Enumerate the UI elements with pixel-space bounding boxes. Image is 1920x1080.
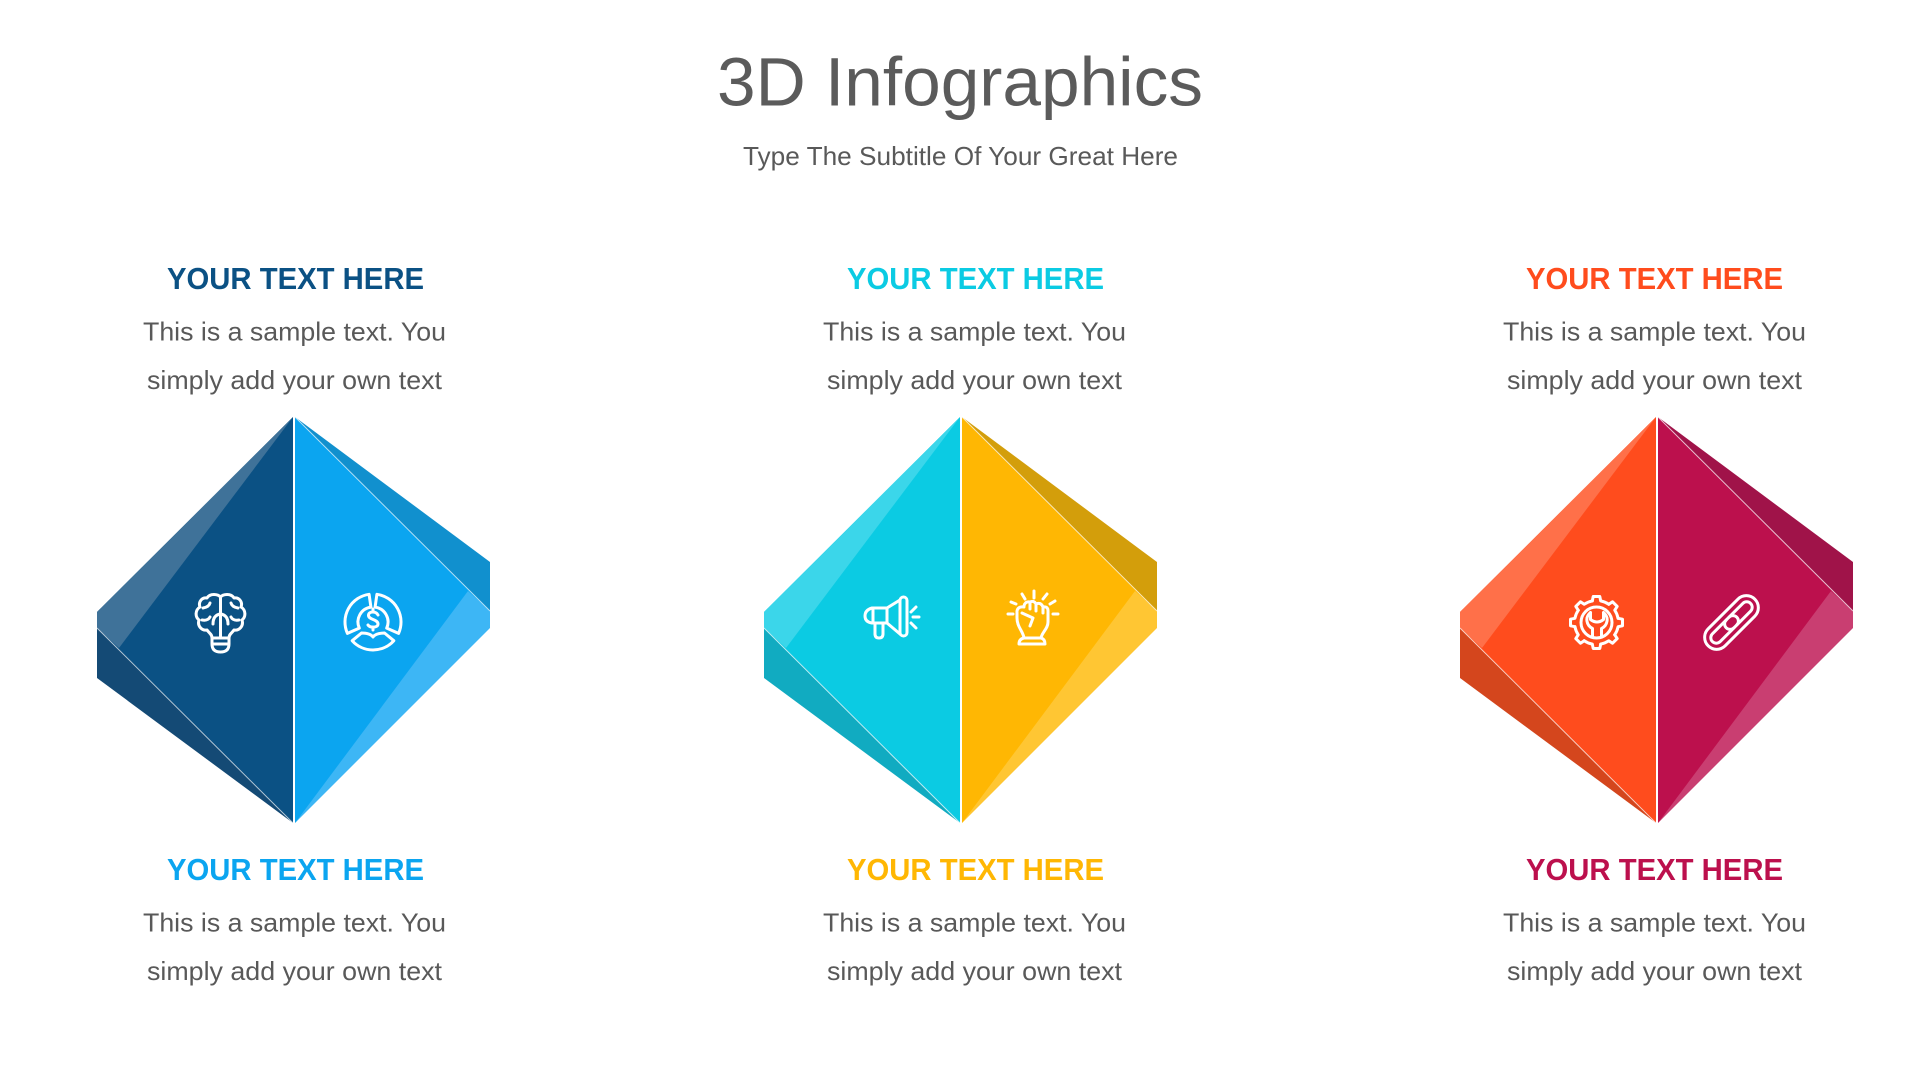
text block: column 3 top: [1503, 261, 1806, 395]
text block: column 1 top: [143, 261, 446, 395]
text block: column 2 top: [823, 261, 1126, 395]
title: 3D Infographics: [717, 44, 1203, 120]
icon: brain bulb: [196, 594, 245, 652]
text block: column 1 top: simply add your own text: [147, 365, 443, 395]
diamond: cyan and yellow: [764, 417, 1157, 823]
text block: column 2 bottom: YOUR TEXT HERE: [847, 852, 1104, 887]
text block: column 2 bottom: [823, 852, 1126, 986]
text block: column 2 top: simply add your own text: [827, 365, 1123, 395]
text block: column 2 bottom: simply add your own text: [827, 956, 1123, 986]
text block: column 1 bottom: YOUR TEXT HERE: [167, 852, 424, 887]
icon: dollar pie: [345, 594, 401, 650]
text block: column 1 bottom: [143, 852, 446, 986]
text block: column 1 bottom: simply add your own text: [147, 956, 443, 986]
text block: column 3 top: This is a sample text. You: [1503, 316, 1806, 346]
text block: column 3 bottom: simply add your own text: [1507, 956, 1803, 986]
icon: raised fist: [1008, 591, 1058, 644]
text block: column 3 bottom: This is a sample text. You: [1503, 908, 1806, 938]
text block: column 2 top: This is a sample text. You: [823, 316, 1126, 346]
text block: column 1 top: YOUR TEXT HERE: [167, 261, 424, 296]
text block: column 1 bottom: This is a sample text. You: [143, 908, 446, 938]
text block: column 1 top: This is a sample text. You: [143, 316, 446, 346]
icon: chain link: [1700, 591, 1763, 654]
center divider lines: [293, 417, 1658, 823]
text block: column 3 bottom: [1503, 852, 1806, 986]
diamond: orange and crimson: [1460, 417, 1853, 823]
text block: column 2 top: YOUR TEXT HERE: [847, 261, 1104, 296]
text block: column 2 bottom: This is a sample text. You: [823, 908, 1126, 938]
text block: column 3 bottom: YOUR TEXT HERE: [1526, 852, 1783, 887]
diamond: navy and blue: [97, 417, 490, 823]
text block: column 3 top: YOUR TEXT HERE: [1526, 261, 1783, 296]
icon: megaphone: [865, 597, 919, 638]
icon: gear with wrench: [1569, 595, 1624, 650]
text block: column 3 top: simply add your own text: [1507, 365, 1803, 395]
subtitle: Type The Subtitle Of Your Great Here: [743, 141, 1178, 171]
